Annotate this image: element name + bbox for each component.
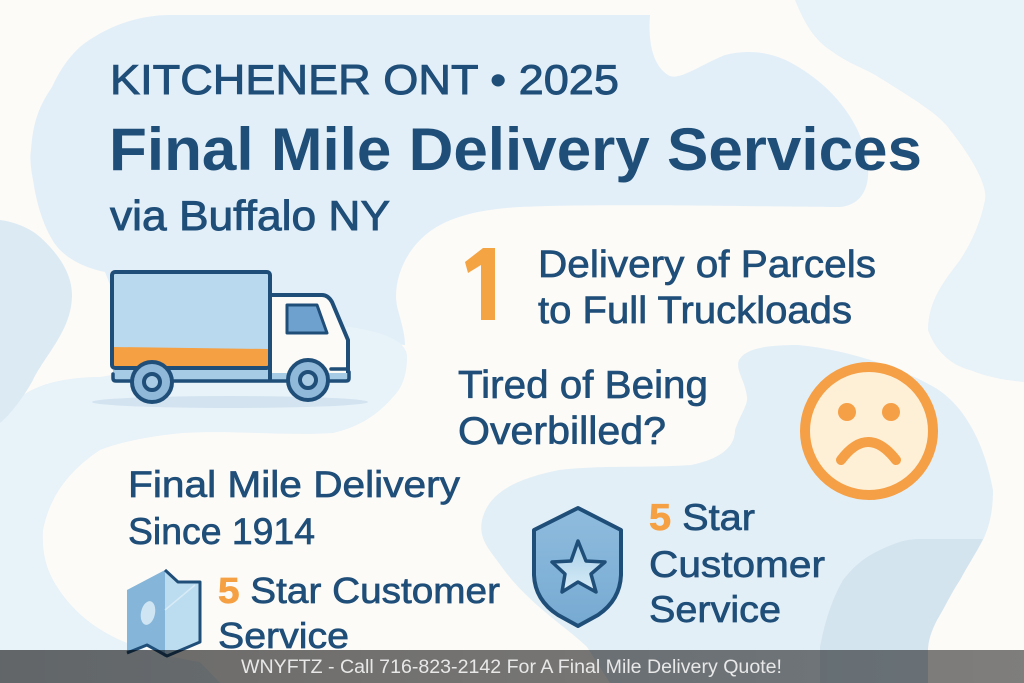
icon: shield with star xyxy=(534,508,621,626)
text: tired of being overbilled xyxy=(458,364,708,453)
text: 5 star customer service: 5 Star Customer xyxy=(218,570,500,611)
text: tired of being overbilled: Tired of Being xyxy=(458,364,708,407)
numeral: 1 xyxy=(465,248,495,320)
footer bar xyxy=(0,650,1024,683)
subheading: via Buffalo NY: via Buffalo NY xyxy=(110,192,390,239)
text: 5 star customer service right: Customer xyxy=(649,544,825,585)
heading: Final Mile Delivery Services: Final Mile Delivery Services xyxy=(109,116,922,183)
text: 5 star customer service right: Service xyxy=(649,589,781,630)
text: 5 star customer service xyxy=(218,570,500,656)
text: final mile delivery since 1914 xyxy=(128,464,461,552)
text: delivery of parcels: Delivery of Parcels xyxy=(538,244,876,286)
text: 5 star customer service right: 5 Star xyxy=(649,497,755,538)
title: location and year: KITCHENER ONT • 2025 xyxy=(110,56,619,103)
footer bar: WNYFTZ - Call 716-823-2142 For A Final Mile Delivery Quote! xyxy=(241,657,782,678)
text: final mile delivery since 1914: Since 1914 xyxy=(128,511,315,552)
icon: folded map xyxy=(127,570,200,657)
text: 5 star customer service: Service xyxy=(218,615,349,656)
text: to full truckloads: to Full Truckloads xyxy=(538,290,852,332)
icon: sad face xyxy=(805,367,933,495)
text: final mile delivery since 1914: Final Mile Delivery xyxy=(128,464,461,505)
text: 5 star customer service right xyxy=(649,497,825,630)
icon: delivery truck xyxy=(92,272,368,408)
text: tired of being overbilled: Overbilled? xyxy=(458,410,666,453)
